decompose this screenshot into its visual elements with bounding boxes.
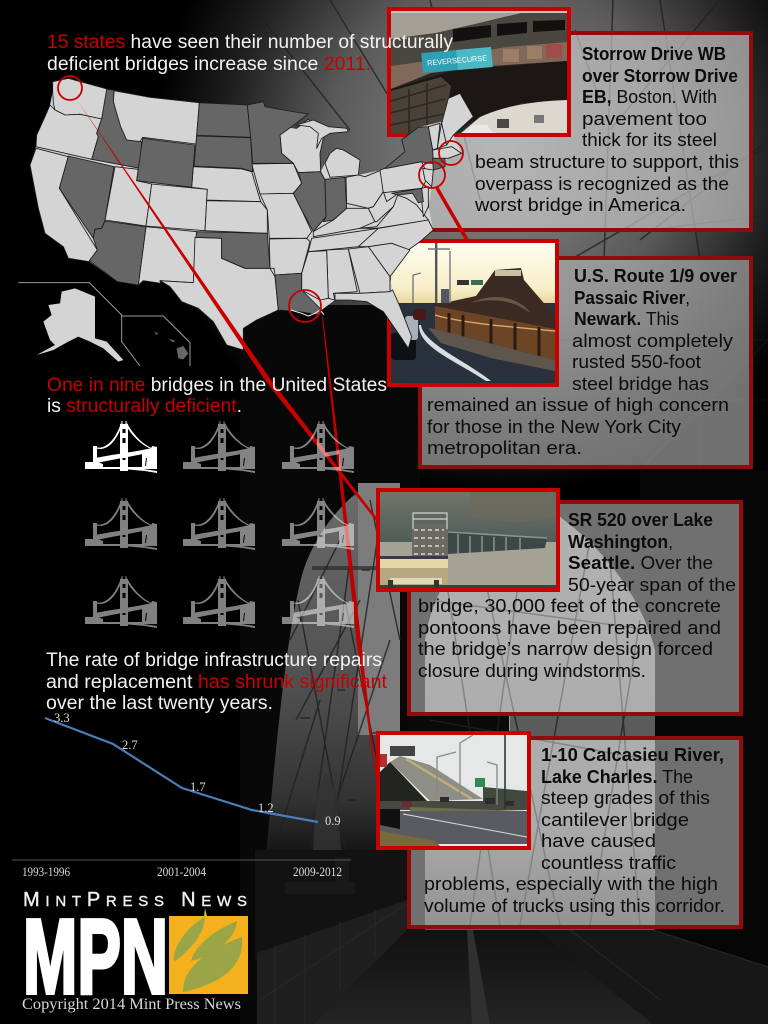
text: SR 520 description: bridge, 30,000 feet of the concrete (418, 595, 721, 616)
photo: Route 1/9 Passaic River bridge (387, 239, 559, 387)
text: SR 520 description: 50-year span of the (568, 574, 736, 595)
text: Route 1/9 description: steel bridge has (572, 373, 709, 394)
heading: 15 states: deficient bridges increase since 2011. (47, 54, 371, 75)
map base silhouette (30, 82, 473, 350)
Alaska and Hawaii inset (18, 283, 190, 366)
text: SR 520 description: the bridge’s narrow design forced (418, 638, 713, 659)
chart value labels: 0.9 (325, 814, 341, 828)
text: Storrow Drive description: Storrow Drive WB (582, 43, 726, 64)
text: SR 520 description (418, 509, 736, 681)
chart value labels (54, 711, 341, 828)
text: Storrow Drive description: thick for its steel (582, 129, 717, 150)
text: Calcasieu description: cantilever bridge (541, 809, 689, 830)
copyright: Copyright 2014 Mint Press News (22, 996, 241, 1013)
text: Calcasieu description: Lake Charles. The (541, 766, 693, 787)
chart axis labels: 2009-2012 (293, 865, 342, 879)
heading: 15 states (47, 32, 453, 75)
panel: Storrow Drive (427, 33, 751, 230)
text: Route 1/9 description: Passaic River, (574, 287, 690, 308)
panel: U.S. Route 1/9 (420, 258, 751, 467)
text: SR 520 description: pontoons have been repaired and (418, 617, 721, 638)
chart axis labels (22, 865, 342, 879)
text: Calcasieu description: have caused (541, 830, 656, 851)
text: Storrow Drive description: pavement too (582, 108, 707, 129)
connector: New Jersey to Route 1/9 (437, 188, 467, 240)
chart value labels: 2.7 (122, 738, 138, 752)
map: United States (18, 78, 473, 366)
text: Route 1/9 description: for those in the New York City (427, 416, 682, 437)
text: SR 520 description: Seattle. Over the (568, 552, 713, 573)
states without increase (30, 78, 473, 350)
text: SR 520 description: Washington, (568, 531, 673, 552)
connector: Lake Charles to Calcasieu River (322, 317, 376, 775)
logo: MintPress News: MPN (23, 898, 168, 1016)
text: Calcasieu description: problems, especially with the high (424, 873, 718, 894)
text: SR 520 description: closure during windstorms. (418, 660, 646, 681)
walkway (255, 850, 768, 1024)
text: Route 1/9 description (427, 265, 737, 458)
chart value labels: 1.7 (190, 780, 206, 794)
photo: Storrow Drive overpass: REVERSECURSE (427, 53, 487, 68)
heading: 15 states: 15 states have seen their number of structurally (47, 32, 453, 53)
line chart: repair rate (12, 711, 351, 879)
map circles (58, 76, 463, 322)
photo: SR 520 Lake Washington bridge (376, 488, 560, 592)
heading: one in nine (47, 375, 387, 417)
photo: Storrow Drive overpass (387, 7, 571, 137)
text: Storrow Drive description (474, 43, 739, 215)
text: Route 1/9 description: almost completely (572, 330, 734, 351)
heading: one in nine: One in nine bridges in the United States (47, 375, 387, 396)
text: Calcasieu description: countless traffic (541, 852, 676, 873)
logo: MintPress News: M INT P RESS N EWS (23, 889, 247, 911)
states with increase (59, 89, 445, 315)
connector: Seattle to SR 520 (77, 100, 377, 522)
Louisiana coast outline (291, 310, 324, 316)
pictogram: nine bridges, one highlighted (85, 421, 354, 628)
text: Storrow Drive description: overpass is recognized as the (475, 173, 729, 194)
heading: repair rate: over the last twenty years. (46, 693, 273, 714)
heading: repair rate: and replacement has shrunk significant (46, 672, 388, 693)
heading: repair rate (46, 650, 388, 714)
heading: repair rate: The rate of bridge infrastructure repairs (46, 650, 382, 671)
text: Storrow Drive description: beam structure to support, this (475, 151, 739, 172)
text: Route 1/9 description: Newark. This (574, 308, 679, 329)
text: Route 1/9 description: metropolitan era. (427, 437, 582, 458)
chart value labels: 1.2 (258, 801, 274, 815)
text: Calcasieu description: steep grades of this (541, 787, 710, 808)
text: Route 1/9 description: U.S. Route 1/9 over (574, 265, 737, 286)
text: Storrow Drive description: EB, Boston. With (582, 86, 717, 107)
text: Calcasieu description: volume of trucks using this corridor. (424, 895, 725, 916)
photo: I-10 Calcasieu River bridge (376, 731, 531, 850)
text: Calcasieu description (424, 744, 725, 916)
text: Calcasieu description: 1-10 Calcasieu River, (541, 744, 724, 765)
panel: Calcasieu River (409, 738, 741, 927)
text: Storrow Drive description: over Storrow Drive (582, 65, 738, 86)
text: SR 520 description: SR 520 over Lake (568, 509, 713, 530)
panel: SR 520 (409, 502, 741, 714)
text: Storrow Drive description: worst bridge in America. (474, 194, 686, 215)
text: Route 1/9 description: remained an issue of high concern (427, 394, 729, 415)
chart axis labels: 2001-2004 (157, 865, 207, 879)
heading: one in nine: is structurally deficient. (47, 396, 242, 417)
chart axis labels: 1993-1996 (22, 865, 70, 879)
text: Route 1/9 description: rusted 550-foot (572, 351, 701, 372)
chart value labels: 3.3 (54, 711, 70, 725)
